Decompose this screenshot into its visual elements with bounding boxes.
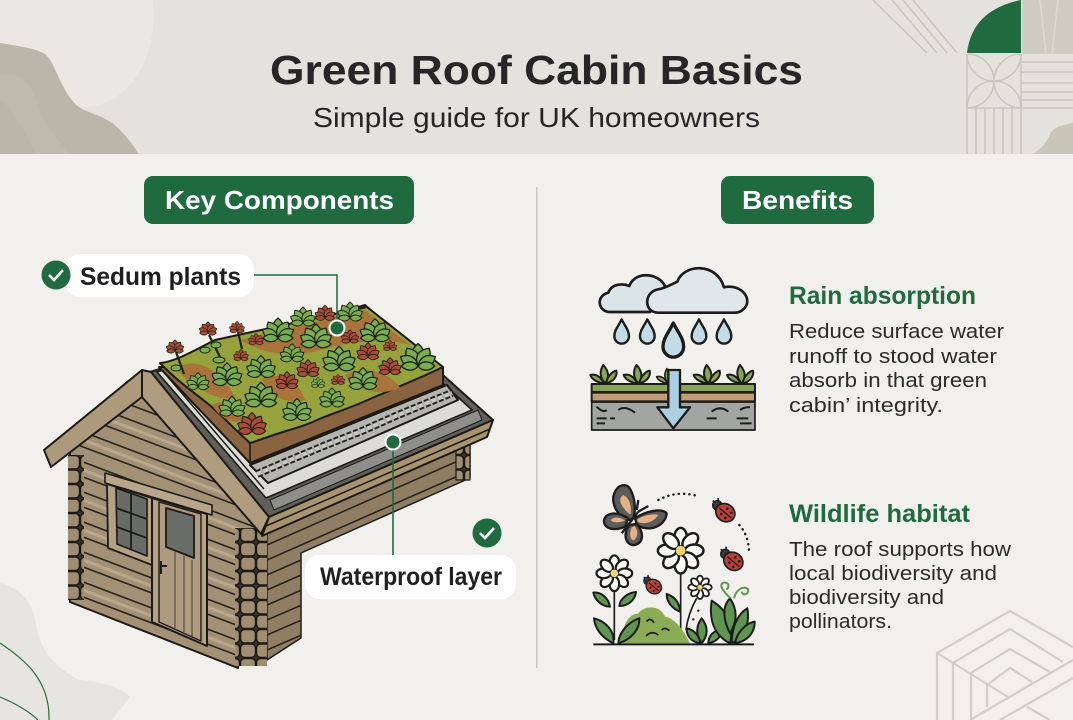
- sedum plants: [165, 302, 438, 435]
- icon: rain absorption: [590, 268, 755, 430]
- benefit text: rain absorption: Rain absorption: [789, 282, 976, 310]
- illustration: log cabin with green roof: [44, 302, 493, 668]
- heading: key components: Key Components: [165, 185, 394, 215]
- benefit text: rain absorption: runoff to stood water: [789, 346, 997, 368]
- side wall: [267, 445, 470, 660]
- subtitle: Simple guide for UK homeowners: [313, 102, 760, 133]
- benefit text: rain absorption: cabin’ integrity.: [789, 395, 943, 417]
- benefit text: rain absorption: [789, 282, 1004, 417]
- right barge board: [142, 370, 269, 534]
- decoration: bottom-left leaf shape: [0, 583, 130, 720]
- benefit text: wildlife habitat: The roof supports how: [789, 539, 1012, 561]
- decoration: bottom-right hexagon lines: [937, 611, 1073, 720]
- decoration: header top-right geometric pattern: [873, 0, 1073, 154]
- callout: waterproof layer: Waterproof layer: [320, 563, 502, 591]
- benefit text: wildlife habitat: Wildlife habitat: [789, 500, 971, 528]
- callout: sedum plants: Sedum plants: [80, 263, 241, 291]
- benefit text: wildlife habitat: biodiversity and: [789, 587, 944, 609]
- benefit text: wildlife habitat: [789, 500, 1012, 633]
- icon: wildlife habitat: [593, 485, 755, 644]
- callout: waterproof layer: [305, 434, 516, 599]
- log corners: [68, 455, 267, 666]
- callout: sedum plants: [42, 254, 344, 336]
- butterfly: [604, 485, 667, 545]
- benefit text: rain absorption: absorb in that green: [789, 370, 987, 392]
- heading: benefits: Benefits: [742, 185, 853, 215]
- door: [105, 473, 212, 646]
- heading: key components: [144, 176, 414, 224]
- benefit text: rain absorption: Reduce surface water: [789, 321, 1004, 343]
- decoration: header top-left shapes: [0, 0, 154, 154]
- front wall: [70, 382, 262, 668]
- benefit text: wildlife habitat: pollinators.: [789, 611, 892, 633]
- left barge board: [44, 370, 142, 467]
- waterproof and drainage layer: [250, 385, 458, 483]
- roof layers: [150, 305, 493, 536]
- soil layer: [159, 307, 443, 463]
- header band: [0, 0, 1073, 154]
- title: Green Roof Cabin Basics: [270, 47, 803, 93]
- heading: benefits: [721, 176, 874, 224]
- benefit text: wildlife habitat: local biodiversity and: [789, 563, 997, 585]
- window: [107, 484, 152, 565]
- divider: [536, 187, 538, 668]
